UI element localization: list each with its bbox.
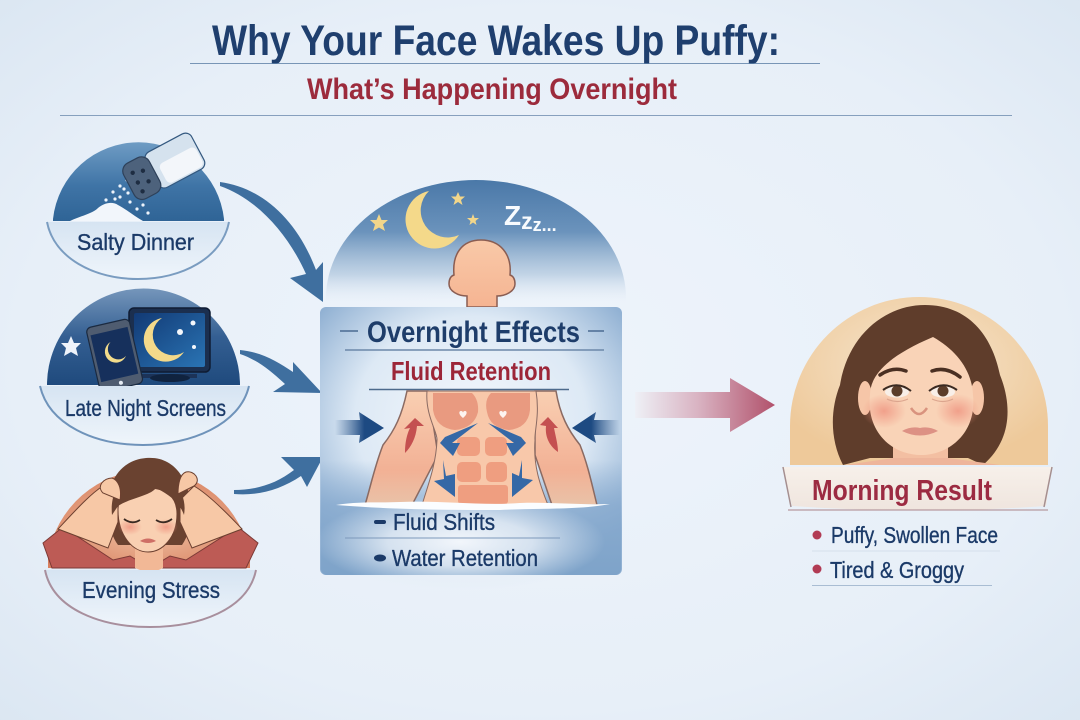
label: Salty Dinner (77, 229, 194, 255)
subtitle: What’s Happening Overnight (307, 73, 677, 106)
neck (135, 546, 163, 574)
morning result banner (783, 467, 1052, 510)
heading: Overnight Effects (367, 316, 580, 349)
water area (321, 460, 621, 575)
brows (880, 369, 960, 377)
forearms (58, 486, 118, 548)
label: Late Night Screens (65, 395, 226, 421)
side arrow: right (572, 412, 620, 443)
label bowl (40, 386, 249, 445)
title: Why Your Face Wakes Up Puffy: (212, 17, 780, 65)
eyes (885, 386, 909, 398)
neck (893, 447, 948, 458)
red arrows (404, 418, 424, 453)
label: Evening Stress (82, 577, 220, 603)
shirt (43, 527, 258, 568)
abs (457, 437, 508, 504)
result list (812, 522, 1000, 586)
water surface (336, 502, 610, 510)
face (870, 337, 973, 455)
arrow: salty dinner to effects (220, 182, 323, 302)
cause card: late night screens (40, 289, 249, 445)
night sky dome (326, 180, 626, 416)
snoring text: z (521, 208, 533, 234)
heading: Morning Result (812, 475, 992, 507)
illustration: salt shaker and pile (53, 131, 224, 221)
snoring text: z... (533, 215, 557, 235)
snoring text: Z (504, 200, 521, 231)
sleeping head (449, 240, 515, 307)
cause card: salty dinner (47, 131, 229, 279)
arrow: effects to morning result (635, 378, 775, 432)
nose (911, 408, 927, 414)
subheading: Fluid Retention (391, 356, 551, 386)
illustration: phone and monitor at night (47, 289, 240, 393)
ears (858, 381, 872, 415)
blue fluid arrows (434, 423, 533, 497)
arrow: screens to effects (240, 350, 322, 393)
bullet: tired: Tired & Groggy (830, 557, 964, 583)
arrow: stress to effects (234, 457, 323, 494)
cause card: evening stress (43, 458, 258, 627)
bullet: puffy face: Puffy, Swollen Face (831, 522, 998, 548)
panel: overnight effects (315, 307, 622, 590)
bullet: water retention: Water Retention (392, 545, 538, 571)
face (118, 488, 177, 552)
hair back (107, 458, 191, 545)
bangs (112, 474, 185, 515)
illustration: torso (365, 391, 597, 505)
hair back (833, 305, 1008, 465)
label bowl (47, 222, 229, 279)
mouth (902, 427, 938, 436)
side arrow: left (335, 412, 384, 443)
arms (365, 391, 438, 505)
chest (433, 393, 478, 430)
illustration: stressed woman (43, 458, 258, 574)
trunk (422, 391, 548, 505)
label bowl (45, 570, 256, 627)
morning result portrait (790, 297, 1048, 465)
icon: moon (406, 191, 459, 248)
bullet: fluid shifts: Fluid Shifts (393, 509, 495, 535)
icon: stars (370, 192, 479, 231)
